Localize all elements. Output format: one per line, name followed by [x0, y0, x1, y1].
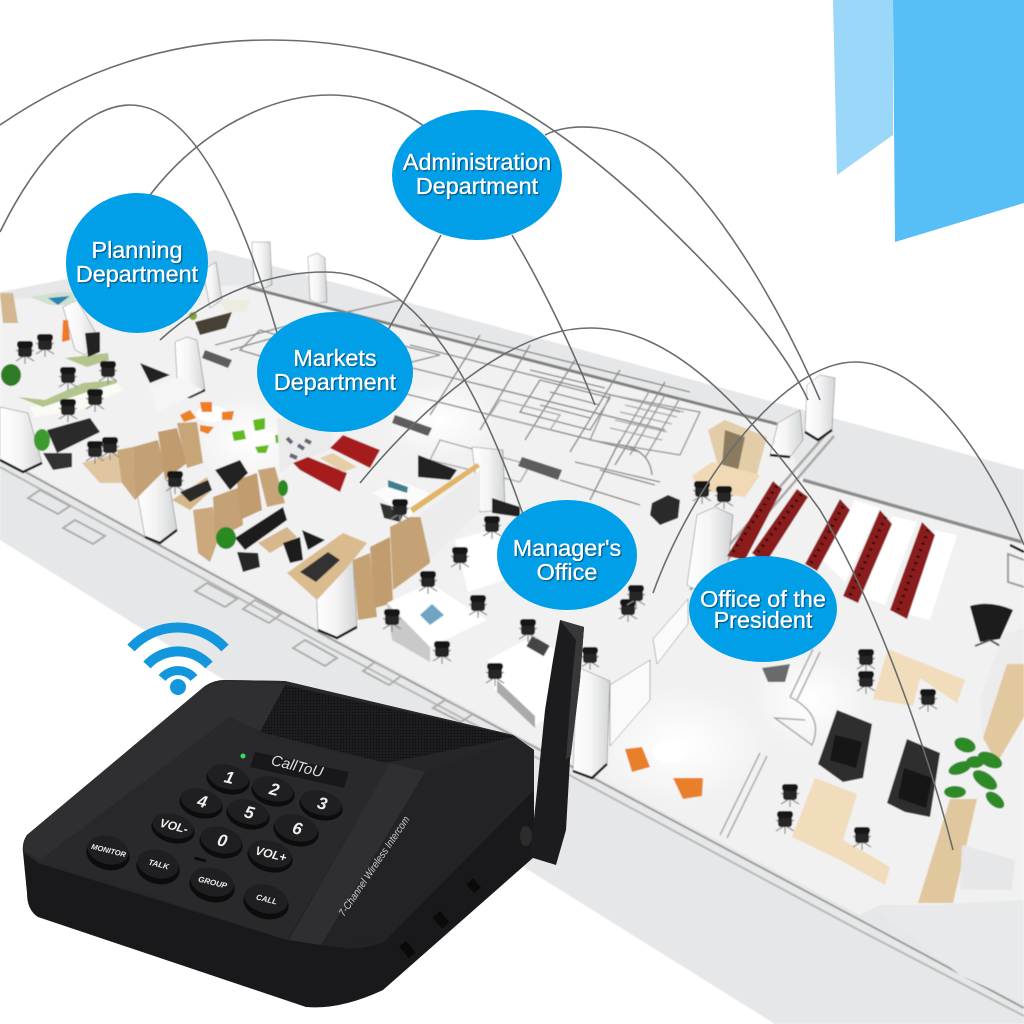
floor fade at bottom right: [875, 900, 1024, 1004]
office floor plan: [0, 242, 1024, 1024]
logo: CallToU: [269, 752, 325, 781]
product: intercom base unit: [23, 620, 584, 1007]
interior lit floor: [0, 285, 1024, 915]
keypad: [83, 760, 346, 924]
small benches: [202, 350, 562, 480]
device body: [23, 680, 534, 1007]
bubble: Markets Department: [257, 312, 413, 432]
bubble: Planning Department: Department: [76, 261, 199, 287]
small chair clusters left: [16, 334, 184, 587]
blueprint drawing: [215, 300, 700, 505]
microphone slit: [194, 857, 206, 862]
keypad: 4: [194, 791, 210, 812]
bubble: Administration Department: Administration: [403, 149, 551, 175]
keypad: 3: [315, 793, 330, 814]
president's office: [762, 604, 1013, 885]
pillar feet: [0, 390, 1024, 778]
keypad: VOL+: [254, 843, 288, 865]
keypad: TALK: [147, 858, 171, 872]
corner decoration: blue ribbons: [833, 0, 1024, 242]
keypad: VOL-: [158, 816, 190, 836]
bubble: Markets Department: Department: [274, 369, 397, 395]
right bevel strip: [289, 763, 425, 945]
speaker grille: [260, 685, 517, 763]
plant: [944, 735, 1007, 812]
bubble: Administration Department: [392, 110, 562, 240]
left office: reception and workstations: [0, 292, 250, 470]
antenna: [530, 620, 584, 865]
bubble: Planning Department: [66, 193, 208, 333]
keypad: CALL: [255, 893, 278, 907]
bookshelf wall and red sofas: [277, 417, 380, 492]
conference room: red chair rows: [650, 420, 957, 620]
side ports: [399, 878, 481, 958]
device top face: [23, 680, 534, 948]
icon: wifi signal: [131, 627, 225, 695]
bubble: Manager's Office: [497, 500, 637, 610]
walls: double outline: [0, 287, 1024, 1016]
status LED: [240, 754, 246, 758]
bubble: Administration Department: Department: [416, 173, 539, 199]
antenna hinge: [520, 826, 532, 846]
tan executive offices: [82, 422, 430, 620]
central workstation cluster: [373, 455, 645, 728]
lounge: orange and green chairs: [180, 402, 281, 453]
bubble: Office of the President: Office of the: [700, 586, 826, 612]
right wall, tan cabinets: [918, 628, 1024, 903]
keypad: 5: [242, 802, 257, 823]
keypad: 1: [222, 767, 236, 788]
keypad: GROUP: [197, 875, 229, 891]
keypad: 2: [266, 779, 282, 800]
bubble: Manager's Office: Manager's: [513, 535, 621, 561]
model label: 7-Channel Wireless Intercom: [337, 814, 413, 919]
orange lounge chairs: [625, 741, 703, 799]
bubble: Office of the President: [689, 556, 837, 662]
bubble: Planning Department: Planning: [91, 237, 183, 263]
display with logo: [250, 752, 349, 788]
lit patches: [190, 380, 870, 805]
wireless link curves: [0, 40, 1024, 850]
left bevel panel: [23, 681, 285, 860]
floor slab: [0, 250, 1024, 1024]
keypad: 6: [290, 818, 305, 839]
pillars: [0, 242, 835, 778]
bubble: Office of the President: President: [714, 607, 813, 633]
keypad: MONITOR: [90, 842, 127, 859]
bubble: Manager's Office: Office: [537, 559, 597, 585]
keypad: 0: [215, 830, 230, 851]
bubble: Markets Department: Markets: [293, 345, 377, 371]
